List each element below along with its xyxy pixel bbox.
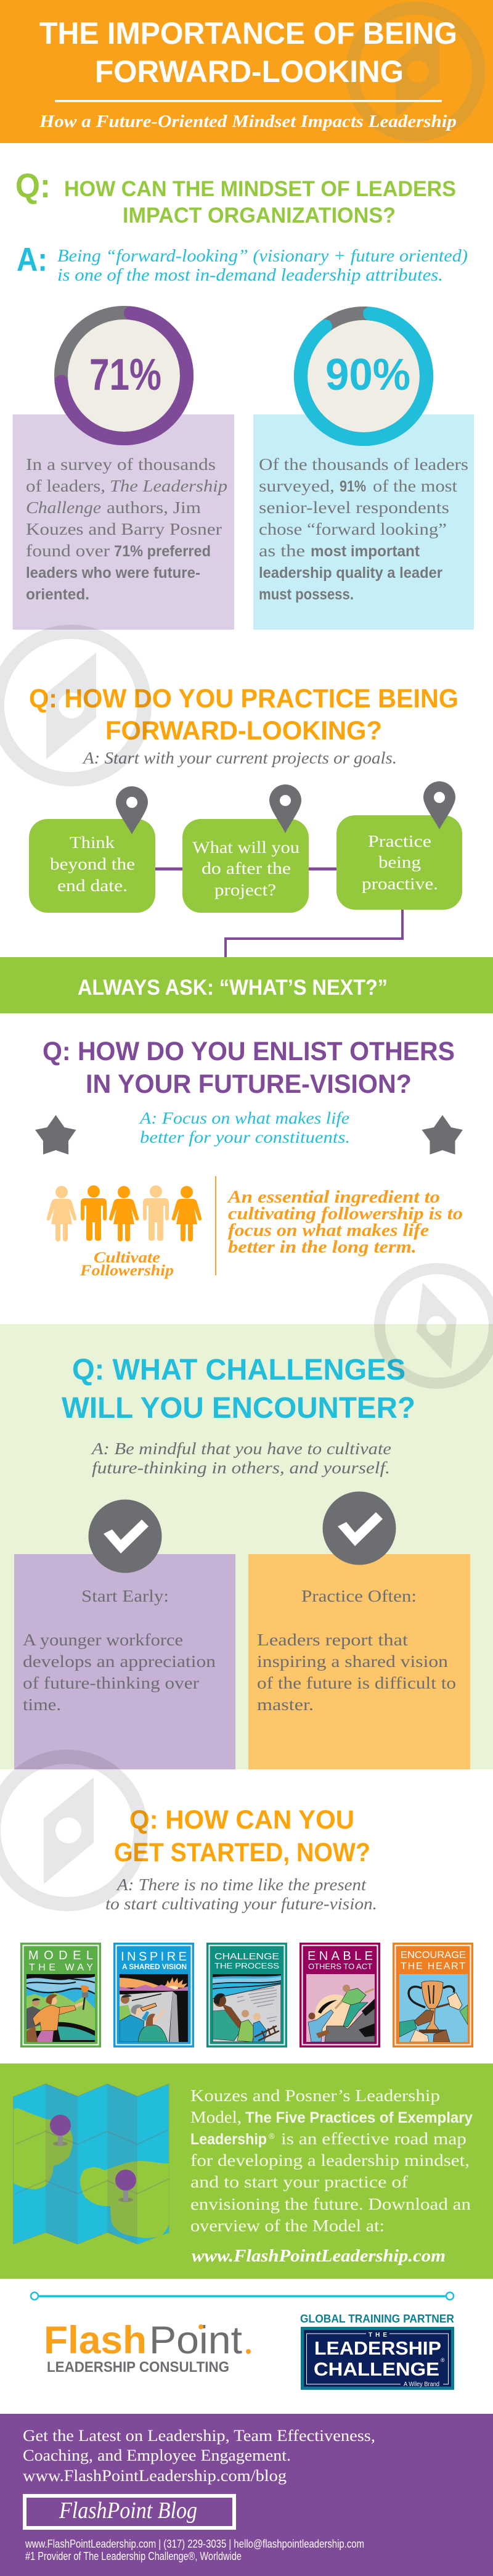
question heading [43,1037,455,1099]
panel: 90 percent text: of the most [373,477,458,495]
panel: 71 percent text: Kouzes and Barry Posner [26,520,222,538]
logo: FlashPoint: LEADERSHIP CONSULTING [47,2359,229,2376]
card: enable others to act: OTHERS TO ACT [308,1962,372,1971]
answer: A: [17,241,47,278]
footer blog invitation: www.FlashPointLeadership.com/blog [23,2467,287,2485]
panel: practice often: inspiring a shared vision [257,1652,449,1671]
icon: map pin 3 [423,781,455,829]
panel: 71 percent text: 71% preferred [114,543,211,560]
answer: to start cultivating your future-vision. [105,1895,377,1913]
section: leadership model [0,2064,493,2279]
answer [105,1875,377,1913]
answer [17,241,468,285]
panel: 90 percent text: 91% [340,478,366,495]
answer [139,1109,350,1146]
panel: 71 percent text: The Leadership [110,477,227,495]
logo: The Leadership Challenge: THE [369,2332,387,2339]
step: think beyond: end date. [57,876,128,895]
logo: The Leadership Challenge: CHALLENGE [314,2358,439,2380]
text: five practices description: Model, [190,2108,242,2126]
contact details [25,2538,364,2562]
card: model the way: MODEL [28,1949,93,1962]
section: question 2 [0,632,462,957]
divider line with end circles [31,2292,454,2300]
footer blog invitation: Coaching, and Employee Engagement. [23,2446,291,2464]
contact details: #1 Provider of The Leadership Challenge®, Worldwide [25,2550,242,2562]
question heading [15,166,456,228]
question heading [62,1354,415,1425]
card: model the way: THE WAY [29,1962,93,1973]
panel: practice often [248,1554,470,1769]
callout text: An essential ingredient to [227,1187,440,1207]
panel: 90 percent text [253,414,474,630]
question heading [114,1805,370,1867]
icon: compass watermark [0,632,144,780]
icon: compass watermark [0,1756,141,1904]
card: encourage the heart [393,1943,473,2047]
donut chart: 90%: 90% [325,350,410,400]
question heading: IN YOUR FUTURE-VISION? [86,1069,412,1099]
icon: star right [422,1115,463,1154]
panel: 71 percent text: authors, Jim [107,498,201,517]
step: practice proactive: being [378,853,421,871]
answer: is one of the most in-demand leadership attributes. [57,265,443,285]
card: enable others to act: ENABLE [308,1949,373,1963]
label: cultivate followership [79,1249,174,1279]
title: FORWARD-LOOKING [95,54,404,89]
text: five practices description: The Five Practices of Exemplary [245,2109,473,2126]
contact details: www.FlashPointLeadership.com | (317) 229-3035 | hello@flashpointleadership.com [25,2538,364,2550]
logo: The Leadership Challenge: A Wiley Brand [404,2381,439,2388]
question heading: Q: HOW DO YOU ENLIST OTHERS [43,1037,455,1066]
icon: folded map [14,2084,169,2244]
step: think beyond: beyond the [50,855,135,873]
step: practice proactive: proactive. [362,874,438,893]
icon: map pin 2 [269,784,301,833]
button: FlashPoint Blog [25,2496,234,2528]
panel: 71 percent text: found over [26,541,110,560]
panel: 90 percent text: chose “forward looking” [259,520,447,538]
title: THE IMPORTANCE OF BEING [39,16,457,51]
answer: A: There is no time like the present [116,1875,367,1894]
icon: check circle right [323,1491,396,1565]
header panel [0,0,493,143]
donut chart: 71% [61,313,187,438]
logo: FlashPoint: Point [149,2319,243,2362]
panel: start early: of future-thinking over [23,1674,199,1692]
panel: 90 percent text: leadership quality a leader [259,564,442,582]
icon: compass watermark [352,8,479,135]
question heading: FORWARD-LOOKING? [105,716,382,746]
answer [91,1439,391,1477]
panel: 90 percent text: senior-level respondents [259,498,449,517]
section: question 1 [12,166,474,630]
step: think beyond: Think [70,833,115,852]
step: think beyond [29,819,155,913]
panel: 71 percent text: In a survey of thousands [26,455,216,474]
question heading: Q: WHAT CHALLENGES [72,1354,405,1386]
panel: 90 percent text: surveyed, [259,477,335,495]
card: challenge the process [206,1943,287,2047]
panel: practice often: Leaders report that [257,1631,409,1649]
card: encourage the heart: ENCOURAGE [401,1950,466,1961]
panel: practice often: Practice Often: [301,1587,417,1605]
answer: A: Focus on what makes life [139,1109,349,1127]
question heading: Q: HOW CAN YOU [129,1805,354,1835]
button: FlashPoint Blog: FlashPoint Blog [59,2498,197,2524]
panel: 71 percent text [12,414,234,630]
panel: 71 percent text: leaders who were future- [26,564,200,582]
banner: always ask: ALWAYS ASK: “WHAT’S NEXT?” [78,976,388,1000]
card: enable others to act [299,1943,380,2047]
card: challenge the process: THE PROCESS [214,1961,279,1970]
label: cultivate followership: Followership [79,1262,174,1279]
text: five practices description [190,2086,473,2266]
text: five practices description: ® [269,2131,275,2141]
question heading: IMPACT ORGANIZATIONS? [123,204,396,228]
callout text: better in the long term. [228,1237,417,1257]
question heading: Q: [15,166,51,205]
step: what will you do: do after the [202,859,291,878]
panel: practice often: of the future is difficult to [257,1674,456,1692]
question heading: GET STARTED, NOW? [114,1838,370,1867]
step: practice proactive [336,815,462,910]
donut chart: 90% [301,313,426,439]
icon: star left [35,1115,76,1154]
panel: start early: develops an appreciation [23,1652,216,1671]
callout text: focus on what makes life [228,1220,429,1240]
logo: The Leadership Challenge: LEADERSHIP [314,2337,441,2359]
banner: always ask [0,957,493,1013]
footer panel [0,2414,493,2576]
step: practice proactive: Practice [368,832,431,850]
panel: 71 percent text: oriented. [26,586,89,603]
card: encourage the heart: THE HEART [401,1961,465,1972]
panel: 90 percent text: most important [311,543,420,560]
text: five practices description: Leadership [190,2131,267,2148]
callout text: cultivating followership is to [228,1204,463,1224]
panel: start early: time. [23,1695,61,1714]
callout text [227,1187,463,1257]
text: five practices description: Kouzes and Posner’s Leadership [190,2086,440,2105]
step: what will you do: project? [214,881,276,899]
footer blog invitation: Get the Latest on Leadership, Team Effectiveness, [23,2427,375,2445]
card: inspire a shared vision: A SHARED VISION [122,1962,187,1971]
card: challenge the process: CHALLENGE [214,1951,279,1962]
panel: start early: Start Early: [81,1587,169,1605]
step: what will you do [182,819,309,913]
text: five practices description: www.FlashPointLeadership.com [192,2246,446,2266]
panel: 90 percent text: as the [259,541,305,560]
label: cultivate followership: Cultivate [94,1249,160,1266]
subtitle: How a Future-Oriented Mindset Impacts Leadership [39,112,457,131]
card: model the way [20,1943,101,2047]
text: five practices description: envisioning the future. Download an [190,2195,471,2213]
panel: practice often: master. [257,1695,314,1714]
panel: start early: A younger workforce [23,1631,183,1649]
arrow: connector lines between steps [154,869,402,957]
section: question 5 [0,1756,377,1913]
panel: 71 percent text: Challenge [26,498,101,517]
logo: The Leadership Challenge: ® [441,2357,445,2363]
icon: compass watermark [380,1269,493,1383]
section: question 4 [0,1269,493,1769]
answer: A: Be mindful that you have to cultivate [91,1439,391,1458]
logo: The Leadership Challenge [300,2313,454,2390]
icon: check circle left [89,1500,161,1573]
text: five practices description: is an effective road map [281,2130,467,2148]
card: inspire a shared vision [113,1943,194,2047]
panel: 71 percent text: of leaders, [26,477,105,495]
logo: FlashPoint [44,2319,251,2376]
answer: A: Start with your current projects or goals. [82,749,397,767]
text: five practices description: for developing a leadership mindset, [190,2151,470,2170]
panel: 90 percent text: must possess. [259,586,354,603]
question heading: WILL YOU ENCOUNTER? [62,1392,415,1425]
donut chart: 71%: 71% [89,350,161,400]
icon: group of followers [47,1185,202,1241]
answer: future-thinking in others, and yourself. [92,1459,390,1477]
question heading: Q: HOW DO YOU PRACTICE BEING [29,684,458,714]
title [39,16,457,89]
footer blog invitation [23,2427,375,2485]
text: five practices description: overview of the Model at: [190,2216,385,2235]
section: question 3 [35,1037,463,1279]
icon: map pin 1 [116,786,148,834]
question heading [29,684,458,746]
card: inspire a shared vision: INSPIRE [121,1950,187,1964]
logo: The Leadership Challenge: GLOBAL TRAINING PARTNER [300,2313,454,2325]
logo: FlashPoint: Flash [44,2319,147,2362]
question heading: HOW CAN THE MINDSET OF LEADERS [64,177,456,201]
step: what will you do: What will you [192,838,300,857]
answer: better for your constituents. [140,1128,350,1146]
panel: 90 percent text: Of the thousands of leaders [259,455,468,474]
text: five practices description: and to start your practice of [190,2173,408,2191]
panel: start early [14,1554,235,1769]
answer: Being “forward-looking” (visionary + future oriented) [57,246,468,266]
